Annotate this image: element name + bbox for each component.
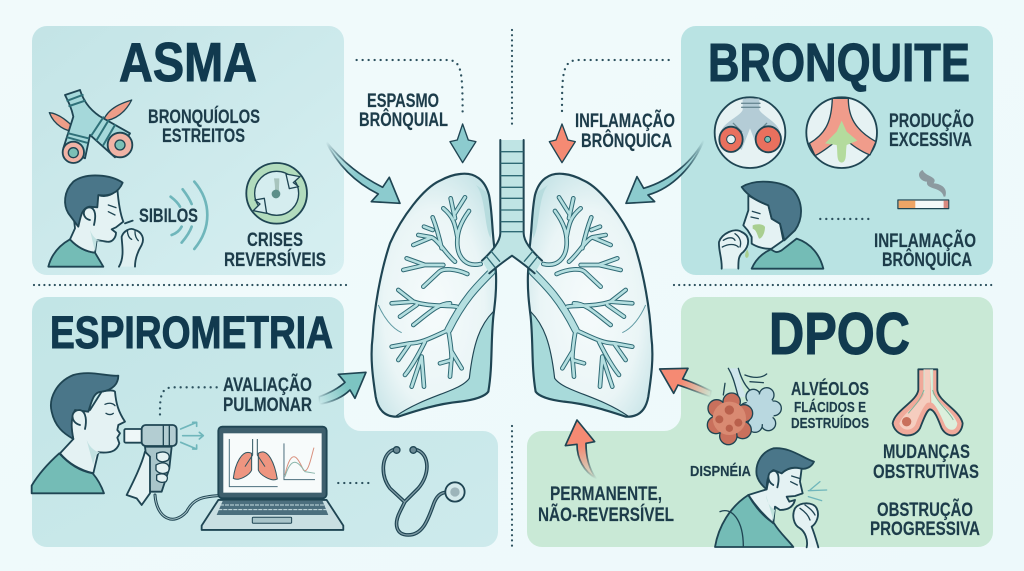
arrow: espasmo down [450, 124, 476, 163]
text: alveolos flacidos e destruidos [791, 378, 869, 432]
icon: man with dyspnea [715, 448, 827, 547]
text: inflamacao bronquica central [575, 110, 675, 152]
text: producao excessiva: PRODUÇÃO [889, 110, 974, 132]
text: espasmo bronquial [359, 91, 448, 131]
icon: damaged alveoli [707, 368, 781, 445]
text: sibilos: SIBILOS [139, 206, 198, 227]
icon: man wheezing [48, 175, 143, 267]
arrow: inflamacao down [549, 124, 575, 163]
text: mudancas obstrutivas [873, 442, 979, 483]
text: producao excessiva [889, 110, 974, 151]
panel: dpoc [527, 297, 993, 547]
icon: reversible cycle [246, 163, 307, 224]
text: mudancas obstrutivas: OBSTRUTIVAS [873, 462, 979, 483]
icon: obstructed airways [893, 369, 963, 435]
text: obstrucao progressiva: OBSTRUÇÃO [877, 499, 973, 521]
text: bronquiolos estreitos [148, 106, 260, 147]
icon: stethoscope [383, 447, 465, 535]
panel: asma [32, 26, 344, 275]
arrow: permanente to lungs [565, 420, 596, 478]
icon: inflamed airways [715, 97, 785, 168]
text: crises reversiveis: CRISES [247, 230, 303, 251]
arrow: bronquite to lungs [626, 138, 705, 203]
text: inflamacao bronquica: BRÔNQUICA [882, 249, 972, 271]
arrow: espirometria to lungs [319, 372, 366, 404]
icon: spirometer cable [155, 495, 218, 519]
arrow: dpoc to lungs [660, 368, 711, 397]
title: asma: ASMA [119, 31, 257, 93]
text: producao excessiva: EXCESSIVA [889, 130, 972, 151]
text: permanente nao-reversivel [538, 484, 674, 526]
text: inflamacao bronquica [874, 230, 976, 271]
text: dispneia: DISPNÉIA [690, 463, 751, 480]
text: avaliacao pulmonar: PULMONAR [223, 395, 312, 416]
right lung [528, 174, 652, 417]
text: obstrucao progressiva: PROGRESSIVA [870, 519, 980, 540]
title: espirometria: ESPIROMETRIA [50, 307, 333, 358]
text: inflamacao bronquica central: INFLAMAÇÃO [575, 110, 675, 132]
icon: cigarette [898, 170, 949, 209]
panel: espirometria [32, 297, 498, 547]
text: crises reversiveis: REVERSÍVEIS [224, 249, 326, 271]
icon: spirometer device [124, 422, 203, 505]
central lungs illustration [372, 140, 652, 417]
text: avaliacao pulmonar [223, 374, 312, 416]
arrow: asma to lungs [325, 140, 400, 203]
text: bronquiolos estreitos: BRONQUÍOLOS [148, 106, 260, 128]
text: avaliacao pulmonar: AVALIAÇÃO [223, 374, 312, 396]
text: alveolos flacidos e destruidos: DESTRUÍDOS [791, 415, 869, 432]
panel: bronquite [681, 26, 993, 275]
icon: narrowed bronchioles [49, 90, 132, 163]
text: permanente nao-reversivel: PERMANENTE, [550, 484, 662, 505]
text: espasmo bronquial: ESPASMO [367, 91, 439, 112]
text: inflamacao bronquica central: BRÔNQUICA [581, 130, 672, 152]
text: mudancas obstrutivas: MUDANÇAS [883, 442, 970, 463]
icon: man coughing mucus [719, 182, 823, 269]
title: bronquite: BRONQUITE [708, 33, 970, 93]
text: bronquiolos estreitos: ESTREITOS [162, 126, 245, 147]
trachea and main bronchi [482, 140, 542, 273]
title: dpoc: DPOC [769, 301, 910, 367]
icon: sound waves [171, 182, 207, 249]
text: espasmo bronquial: BRÔNQUIAL [359, 109, 448, 131]
text: alveolos flacidos e destruidos: FLÁCIDOS E [794, 399, 866, 416]
icon: mucus production [806, 97, 877, 168]
text: inflamacao bronquica: INFLAMAÇÃO [874, 230, 976, 252]
text: permanente nao-reversivel: NÃO-REVERSÍVEL [538, 504, 674, 526]
text: crises reversiveis [224, 230, 326, 271]
text: obstrucao progressiva [870, 499, 980, 540]
text: alveolos flacidos e destruidos: ALVÉOLOS [791, 378, 869, 399]
left lung [372, 174, 496, 417]
icon: man using spirometer [32, 373, 125, 493]
icon: laptop with lung chart [202, 427, 343, 530]
